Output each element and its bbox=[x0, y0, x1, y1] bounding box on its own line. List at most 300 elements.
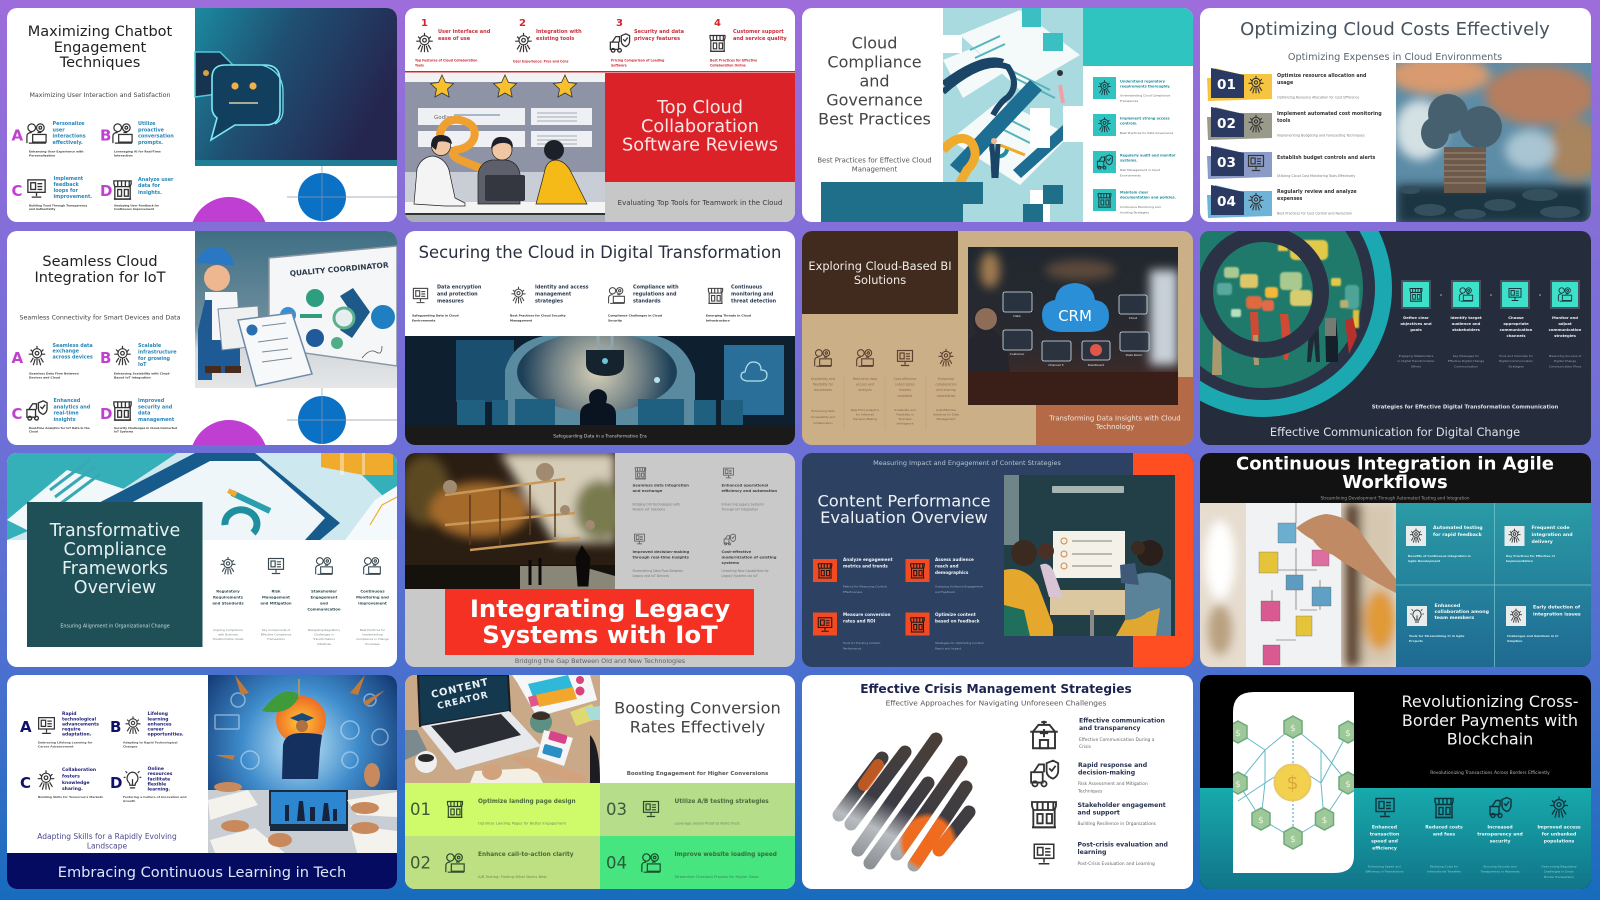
image: CRM cloud: Customer bbox=[1010, 352, 1025, 356]
item A: effectively. bbox=[52, 140, 83, 146]
panel: subtitle: Evaluating Top Tools for Teamwork in the Cloud bbox=[618, 199, 782, 207]
image: content creator desk: CREATOR bbox=[436, 690, 490, 712]
benefit columns: and fees bbox=[1433, 832, 1455, 838]
item C: C bbox=[20, 774, 31, 792]
image: CRM cloud: Dashboard bbox=[1088, 363, 1104, 367]
item D: resources bbox=[148, 771, 173, 777]
benefit columns: populations bbox=[1544, 838, 1575, 844]
item 1 bbox=[1030, 718, 1165, 750]
framework columns: Transformation bbox=[312, 637, 335, 641]
item D bbox=[110, 766, 186, 803]
framework columns: Regulatory bbox=[216, 588, 240, 594]
item A: Rapid bbox=[62, 711, 76, 717]
item grid: Unlocking New Capabilities for bbox=[722, 569, 769, 573]
panel: benefits grid bbox=[1396, 503, 1591, 667]
item 3: Building Resilience in Organizations bbox=[1078, 821, 1157, 827]
benefit columns: Cost-effective bbox=[894, 377, 916, 381]
practices list: documentation and policies. bbox=[1120, 196, 1176, 200]
item B: prompts. bbox=[138, 140, 163, 146]
feature row: Pricing Comparison of Leading bbox=[611, 58, 664, 62]
feature row: Tools bbox=[415, 64, 424, 68]
benefit columns: Real-time data bbox=[853, 377, 877, 381]
framework columns: and bbox=[320, 600, 328, 606]
image: graduate and apple bbox=[208, 675, 397, 853]
item grid: and exchange bbox=[632, 488, 663, 493]
item 03: Leverage Social Proof to Build Trust bbox=[674, 822, 740, 826]
feature row: and protection bbox=[437, 291, 478, 297]
feature row: regulations and bbox=[633, 291, 677, 297]
image: diagonal photo stripes bbox=[839, 739, 969, 865]
item A: user bbox=[52, 128, 65, 134]
panel: benefits grid: Challenges and Solutions in CI bbox=[1507, 634, 1558, 638]
item D: Improved bbox=[138, 398, 165, 404]
panel: benefits grid: Projects bbox=[1409, 639, 1423, 643]
feature row: ease of use bbox=[438, 36, 471, 42]
step text: in Digital Transformation bbox=[1398, 359, 1435, 363]
benefit columns: subscription bbox=[895, 382, 915, 386]
panel: benefits grid: for rapid feedback bbox=[1433, 532, 1483, 538]
item B: IoT bbox=[138, 362, 147, 368]
subtitle: Best Practices for Effective Cloud bbox=[817, 156, 932, 164]
feature row: management bbox=[535, 291, 572, 297]
feature row: Software bbox=[611, 64, 627, 68]
step icons bbox=[1402, 281, 1579, 308]
items: Effectiveness bbox=[843, 590, 863, 594]
item D: Growth bbox=[123, 799, 135, 803]
image: CRM cloud: Cloud bbox=[1129, 316, 1137, 320]
item 3 bbox=[1032, 802, 1166, 827]
step text: Key Messages for bbox=[1453, 354, 1480, 358]
framework columns: Requirements bbox=[213, 594, 244, 600]
benefit columns: efficiency bbox=[1372, 846, 1397, 852]
feature row: Environments bbox=[412, 318, 436, 322]
item B: Leveraging AI for Real-Time bbox=[114, 150, 161, 154]
panel: benefits grid: delivery bbox=[1532, 539, 1553, 545]
practices list: Risk Management in Cloud bbox=[1120, 168, 1160, 172]
framework columns: Management bbox=[262, 594, 290, 600]
image: people under speech bubbles in rings bbox=[1134, 159, 1392, 417]
items: Strategies for Optimizing Content bbox=[935, 641, 985, 645]
item B: B bbox=[110, 718, 121, 736]
item D: data for bbox=[138, 183, 161, 189]
image: CRM cloud: Channel 3 bbox=[1048, 363, 1064, 367]
card: Securing the Cloud in Digital Transformation bbox=[405, 231, 795, 445]
image: blockchain hex network: $ bbox=[1345, 729, 1351, 739]
practices list bbox=[1093, 77, 1176, 214]
feature row: Integration with bbox=[536, 29, 582, 35]
items: Measure conversion bbox=[843, 612, 890, 617]
feature row: Best Practices for Cloud Security bbox=[510, 314, 566, 318]
title: Integration for IoT bbox=[34, 270, 166, 286]
card: Boosting Conversion Rates Effectively bbox=[405, 675, 795, 889]
title: Border Payments with bbox=[1402, 711, 1578, 730]
feature row: and service quality bbox=[733, 36, 787, 42]
item B: conversation bbox=[138, 134, 174, 140]
item D: Analyze user bbox=[138, 177, 174, 183]
item 02: tools bbox=[1277, 118, 1291, 124]
subtitle: Revolutionizing Transactions Across Borders Efficiently bbox=[1430, 770, 1550, 776]
item A: A bbox=[12, 126, 24, 144]
item C bbox=[12, 398, 91, 434]
panel: benefits grid: Benefits of Continuous Integration in bbox=[1408, 554, 1471, 558]
footer strip bbox=[405, 425, 795, 445]
step text: stakeholders bbox=[1452, 327, 1481, 332]
navy title bar: Embracing Continuous Learning in Tech bbox=[58, 864, 346, 881]
panel: benefits grid: Agile Development bbox=[1408, 559, 1441, 563]
feature row: Emerging Threats in Cloud bbox=[706, 314, 751, 318]
item 04: 04 bbox=[1217, 194, 1236, 210]
benefit columns: security bbox=[1490, 838, 1510, 844]
item 02: Implement automated cost monitoring bbox=[1277, 111, 1382, 117]
step text: Communication bbox=[1454, 364, 1478, 368]
feature row: existing tools bbox=[536, 36, 574, 42]
card: Integrating Legacy Systems with IoT bbox=[400, 453, 795, 667]
item grid: modernization of existing bbox=[722, 554, 777, 560]
item D: data bbox=[138, 410, 150, 416]
item C: real-time bbox=[54, 410, 79, 416]
item A: adaptation. bbox=[62, 732, 92, 738]
benefit columns: Scalability and bbox=[811, 377, 835, 381]
item 03: Utilizing Cloud Cost Monitoring Tools Effectively bbox=[1277, 174, 1355, 178]
subtitle: Management bbox=[852, 166, 897, 174]
card: Continuous Integration in Agile Workflows bbox=[1200, 453, 1591, 667]
item 4: Post-Crisis Evaluation and Learning bbox=[1078, 861, 1155, 867]
item A: interactions bbox=[52, 134, 86, 140]
panel: title: Software Reviews bbox=[622, 136, 778, 156]
item C: C bbox=[12, 405, 23, 423]
card: Effective Communication for Digital Change bbox=[1134, 159, 1591, 445]
title: Best Practices bbox=[818, 110, 931, 128]
title panel: Transformative bbox=[49, 521, 180, 541]
item C: Enhanced bbox=[54, 398, 81, 404]
item D: Analyzing User Feedback for bbox=[114, 204, 160, 208]
benefit columns: capabilities bbox=[937, 394, 956, 398]
decoration: purple circle bbox=[192, 197, 266, 222]
panel: benefits grid: Adoption bbox=[1507, 639, 1522, 643]
framework columns: Compliance in Change bbox=[356, 637, 389, 641]
item A: A bbox=[12, 349, 24, 367]
feature row: 2 bbox=[519, 18, 526, 29]
item grid: Bridging Old Technologies with bbox=[632, 502, 680, 506]
item C: Building Skills for Tomorrow's Markets bbox=[38, 795, 103, 799]
item B: Enhancing Scalability with Cloud- bbox=[114, 372, 171, 376]
subtitle: Seamless Connectivity for Smart Devices and Data bbox=[20, 314, 181, 322]
subtitle: Bridging the Gap Between Old and New Technologies bbox=[515, 657, 686, 665]
title panel: Frameworks bbox=[62, 559, 168, 579]
subtitle: Streamlining Development Through Automated Testing and Integration bbox=[1320, 496, 1470, 500]
title: Maximizing Chatbot bbox=[28, 24, 173, 40]
benefit columns: Flexibility in bbox=[896, 412, 914, 416]
benefit columns: Scalability and bbox=[894, 408, 916, 412]
practices list: Frameworks bbox=[1120, 99, 1139, 103]
step text: Engaging Stakeholders bbox=[1399, 354, 1434, 358]
items: demographics bbox=[935, 570, 969, 575]
item D: learning. bbox=[148, 786, 171, 792]
item D: Security Challenges in Cloud-Connected bbox=[114, 426, 177, 430]
image: blockchain hex network: $ bbox=[1286, 772, 1299, 794]
items bbox=[813, 557, 985, 650]
item B: opportunities. bbox=[148, 732, 184, 738]
item 01: Optimize resource allocation and bbox=[1277, 73, 1367, 79]
item 2 bbox=[1031, 761, 1148, 794]
item C: Collaboration bbox=[62, 767, 96, 773]
item 01 bbox=[405, 783, 600, 836]
decoration: purple circle bbox=[192, 420, 266, 445]
item 1: Effective Communication During a bbox=[1079, 737, 1155, 743]
item B: for growing bbox=[138, 356, 171, 362]
panel: benefits grid: team members bbox=[1434, 615, 1474, 621]
benefit columns: Border Transactions bbox=[1544, 875, 1574, 879]
panel: title: Top Cloud bbox=[656, 98, 743, 118]
decoration: blue circle with crosshair bbox=[287, 166, 397, 222]
feature row: Top Features of Cloud Collaboration bbox=[415, 58, 477, 62]
item 01 bbox=[1207, 68, 1367, 101]
image: blockchain hex network: $ bbox=[1290, 724, 1296, 734]
feature row: Compliance Challenges in Cloud bbox=[608, 314, 662, 318]
title: Seamless Cloud bbox=[42, 254, 158, 270]
subtitle: Effective Approaches for Navigating Unforeseen Challenges bbox=[886, 698, 1107, 708]
benefit columns: Enhanced bbox=[1372, 824, 1397, 830]
title: Rates Effectively bbox=[630, 718, 766, 736]
card: Seamless Cloud Integration for IoT bbox=[7, 231, 397, 445]
step text: adjust bbox=[1558, 321, 1572, 326]
panel: benefits grid: Frequent code bbox=[1532, 525, 1570, 531]
item 03 bbox=[600, 783, 795, 836]
item B: Adapting to Rapid Technological bbox=[123, 740, 178, 744]
top text: Measuring Impact and Engagement of Content Strategies bbox=[873, 459, 1061, 467]
step text: objectives and bbox=[1400, 321, 1432, 326]
framework columns: Implementing bbox=[362, 632, 383, 636]
benefit columns: Enhancing Data bbox=[812, 409, 835, 413]
item B bbox=[100, 343, 177, 380]
image: CRM cloud: CRM bbox=[1058, 307, 1092, 325]
item grid bbox=[632, 468, 777, 578]
step text: Choose bbox=[1508, 315, 1524, 320]
image: blockchain hex network: $ bbox=[1235, 780, 1241, 790]
image: security control room bbox=[405, 336, 795, 425]
step text: Efforts bbox=[1411, 364, 1421, 368]
title: Revolutionizing Cross- bbox=[1401, 692, 1579, 711]
items: Assess audience bbox=[935, 557, 974, 562]
image: quality coordinator bbox=[195, 231, 397, 388]
image: blockchain hex network: $ bbox=[1290, 835, 1296, 845]
item B: Interaction bbox=[114, 154, 133, 158]
panel: benefits grid: Enhanced bbox=[1434, 603, 1460, 609]
item A: Seamless data bbox=[52, 343, 93, 349]
benefit columns: Solutions for Data bbox=[933, 412, 959, 416]
panel: benefits grid: Tools for Streamlining CI in Agile bbox=[1409, 634, 1464, 638]
item grid: systems bbox=[722, 560, 740, 565]
benefit columns: models bbox=[899, 388, 911, 392]
feature row: Data encryption bbox=[437, 285, 482, 291]
benefit columns: collaboration bbox=[935, 382, 957, 386]
step text bbox=[1398, 315, 1582, 368]
item C: Real-Time Analytics for IoT Data in the bbox=[29, 426, 90, 430]
item D: D bbox=[100, 182, 112, 200]
card: Maximizing Chatbot Engagement Techniques bbox=[7, 8, 397, 222]
feature row: Collaboration Online bbox=[710, 64, 746, 68]
benefit columns: Ensuring Security and bbox=[1483, 864, 1517, 868]
image: isometric documents bbox=[943, 8, 1083, 222]
benefit columns: and sharing bbox=[936, 388, 956, 392]
item 1: Crisis bbox=[1079, 744, 1092, 750]
benefit columns: Improved access bbox=[1537, 824, 1581, 830]
title: Boosting Conversion bbox=[614, 698, 781, 718]
item grid: Through IoT Integration bbox=[720, 508, 758, 512]
item grid: Improved decision-making bbox=[632, 549, 689, 554]
item D: Online bbox=[148, 766, 164, 772]
step text: communication bbox=[1500, 327, 1533, 332]
feature row: Management bbox=[510, 318, 533, 322]
benefit columns: for unbanked bbox=[1542, 832, 1576, 838]
item D: D bbox=[110, 774, 122, 792]
framework columns: Processes bbox=[365, 642, 380, 646]
step text: Effective Digital Change bbox=[1448, 359, 1484, 363]
item C bbox=[20, 767, 103, 799]
benefit columns: businesses bbox=[814, 388, 832, 392]
item 04: Regularly review and analyze bbox=[1277, 189, 1357, 195]
item 02: 02 bbox=[410, 854, 431, 872]
title: Compliance bbox=[827, 52, 922, 72]
subtitle block: Technology bbox=[1095, 423, 1134, 431]
benefit columns: speed and bbox=[1371, 838, 1398, 844]
item A: across devices bbox=[52, 354, 93, 360]
item 03: 03 bbox=[606, 800, 627, 819]
step text: Measuring Success of bbox=[1549, 354, 1582, 358]
step text: goals bbox=[1410, 327, 1422, 332]
framework columns: Aligning Compliance bbox=[213, 628, 243, 632]
navy title bar bbox=[7, 853, 397, 889]
item C: Building Trust Through Transparency bbox=[29, 204, 87, 208]
feature row bbox=[412, 285, 777, 322]
feature row: User interface and bbox=[438, 29, 491, 35]
benefit columns: Cost-Effective bbox=[936, 408, 956, 412]
feature row: strategies bbox=[535, 298, 563, 304]
item A: advancements bbox=[62, 722, 99, 728]
item 01: Optimize Landing Pages for Better Engagement bbox=[478, 822, 567, 826]
item 01: Optimizing Resource Allocation for Cost Efficiency bbox=[1277, 96, 1359, 100]
panel: benefits grid: integration issues bbox=[1533, 612, 1581, 618]
feature row: Identity and access bbox=[535, 285, 589, 291]
item A: Career Advancement bbox=[38, 744, 74, 748]
item D bbox=[100, 398, 177, 434]
benefit columns: Transparency in Payments bbox=[1479, 870, 1520, 874]
item 01: 01 bbox=[1217, 77, 1236, 93]
image: forest structure bbox=[405, 453, 615, 589]
item D bbox=[100, 177, 174, 211]
item A: A bbox=[20, 718, 32, 736]
image: tablet with documents bbox=[7, 453, 397, 540]
items: Analyzing Audience Engagement bbox=[935, 584, 984, 588]
framework columns: Navigating Regulatory bbox=[308, 628, 340, 632]
item grid: Legacy and IoT Devices bbox=[632, 574, 670, 578]
title: Effective Crisis Management Strategies bbox=[860, 682, 1132, 696]
item 3: Stakeholder engagement bbox=[1078, 802, 1166, 809]
image: team reviewing software bbox=[405, 73, 605, 222]
benefit columns: analysis bbox=[858, 388, 872, 392]
title panel: Overview bbox=[74, 578, 156, 598]
item D: flexible bbox=[148, 782, 166, 788]
item C: insights bbox=[54, 417, 76, 423]
benefit columns: Reducing Costs for bbox=[1430, 864, 1459, 868]
practices list: controls. bbox=[1120, 122, 1137, 126]
panel: subtitle bbox=[605, 182, 795, 222]
items: Tools for Tracking Content bbox=[842, 641, 881, 645]
item grid: Cost-effective bbox=[722, 549, 752, 554]
benefit columns: Reduced costs bbox=[1425, 824, 1463, 830]
item 3: and support bbox=[1078, 810, 1120, 816]
title: Effective Communication for Digital Change bbox=[1270, 425, 1520, 439]
practices list: Environments bbox=[1120, 174, 1141, 178]
benefit columns: transparency and bbox=[1477, 832, 1523, 838]
step text: strategies bbox=[1554, 333, 1577, 338]
item C bbox=[12, 176, 92, 211]
item 03: Establish budget controls and alerts bbox=[1277, 155, 1375, 161]
item D: D bbox=[100, 405, 112, 423]
feature row: Best Practices for Effective bbox=[710, 58, 757, 62]
image: team reviewing software: Godlarch bbox=[434, 115, 459, 121]
step text: Monitor and bbox=[1552, 315, 1578, 320]
title block: Exploring Cloud-Based BI bbox=[808, 259, 952, 273]
item 02 bbox=[405, 836, 600, 889]
title: Workflows bbox=[1342, 472, 1448, 493]
step text: audience and bbox=[1452, 321, 1481, 326]
item 2: Rapid response and bbox=[1078, 762, 1147, 769]
item C: knowledge bbox=[62, 780, 90, 786]
benefit columns: International Transfers bbox=[1427, 870, 1461, 874]
item grid: through real-time insights bbox=[632, 554, 690, 560]
item 4: Post-crisis evaluation and bbox=[1078, 842, 1168, 848]
item C: Cloud bbox=[29, 430, 38, 434]
items: Metrics for Measuring Content bbox=[843, 584, 888, 588]
title: Optimizing Cloud Costs Effectively bbox=[1240, 19, 1550, 40]
item D: facilitate bbox=[148, 776, 170, 782]
step text: appropriate bbox=[1503, 321, 1529, 326]
item A bbox=[12, 343, 93, 380]
item 2: Techniques bbox=[1077, 788, 1103, 794]
panel: benefits grid: collaboration among bbox=[1434, 609, 1489, 615]
card: Exploring Cloud-Based BI Solutions bbox=[802, 231, 1193, 445]
item 04: expenses bbox=[1277, 197, 1303, 202]
item 02: A/B Testing: Finding What Works Best bbox=[478, 875, 547, 879]
item C: improvement. bbox=[54, 194, 92, 200]
items: Analyze engagement bbox=[843, 557, 893, 562]
item B: infrastructure bbox=[138, 350, 177, 356]
subtitle block bbox=[1036, 377, 1193, 445]
item B: career bbox=[148, 726, 165, 732]
framework columns: Effective Compliance bbox=[261, 632, 291, 636]
image: content creator desk bbox=[405, 675, 600, 783]
practices list: Best Practices for Data Governance bbox=[1120, 131, 1174, 135]
feature row: Security and data bbox=[634, 29, 684, 35]
item 02: Enhance call-to-action clarity bbox=[478, 852, 574, 858]
items: rates and ROI bbox=[843, 618, 876, 624]
title panel: Ensuring Alignment in Organizational Change bbox=[60, 624, 170, 630]
title: Engagement bbox=[54, 40, 147, 56]
framework columns: Stakeholder bbox=[311, 588, 337, 594]
items: Reach and Impact bbox=[935, 646, 962, 650]
image: CRM cloud: Data bbox=[1013, 314, 1021, 318]
card: Optimizing Cloud Costs Effectively bbox=[1200, 8, 1600, 225]
benefit columns: Real-Time Analytics bbox=[851, 408, 880, 412]
item 02: 02 bbox=[1217, 116, 1236, 132]
item D: security and bbox=[138, 404, 173, 410]
title block bbox=[802, 231, 958, 314]
item A: Enhancing User Experience with bbox=[29, 150, 83, 154]
item A: Seamless Data Flow Between bbox=[29, 372, 79, 376]
step text: Digital Change bbox=[1554, 359, 1576, 363]
item 2: decision-making bbox=[1078, 770, 1135, 776]
